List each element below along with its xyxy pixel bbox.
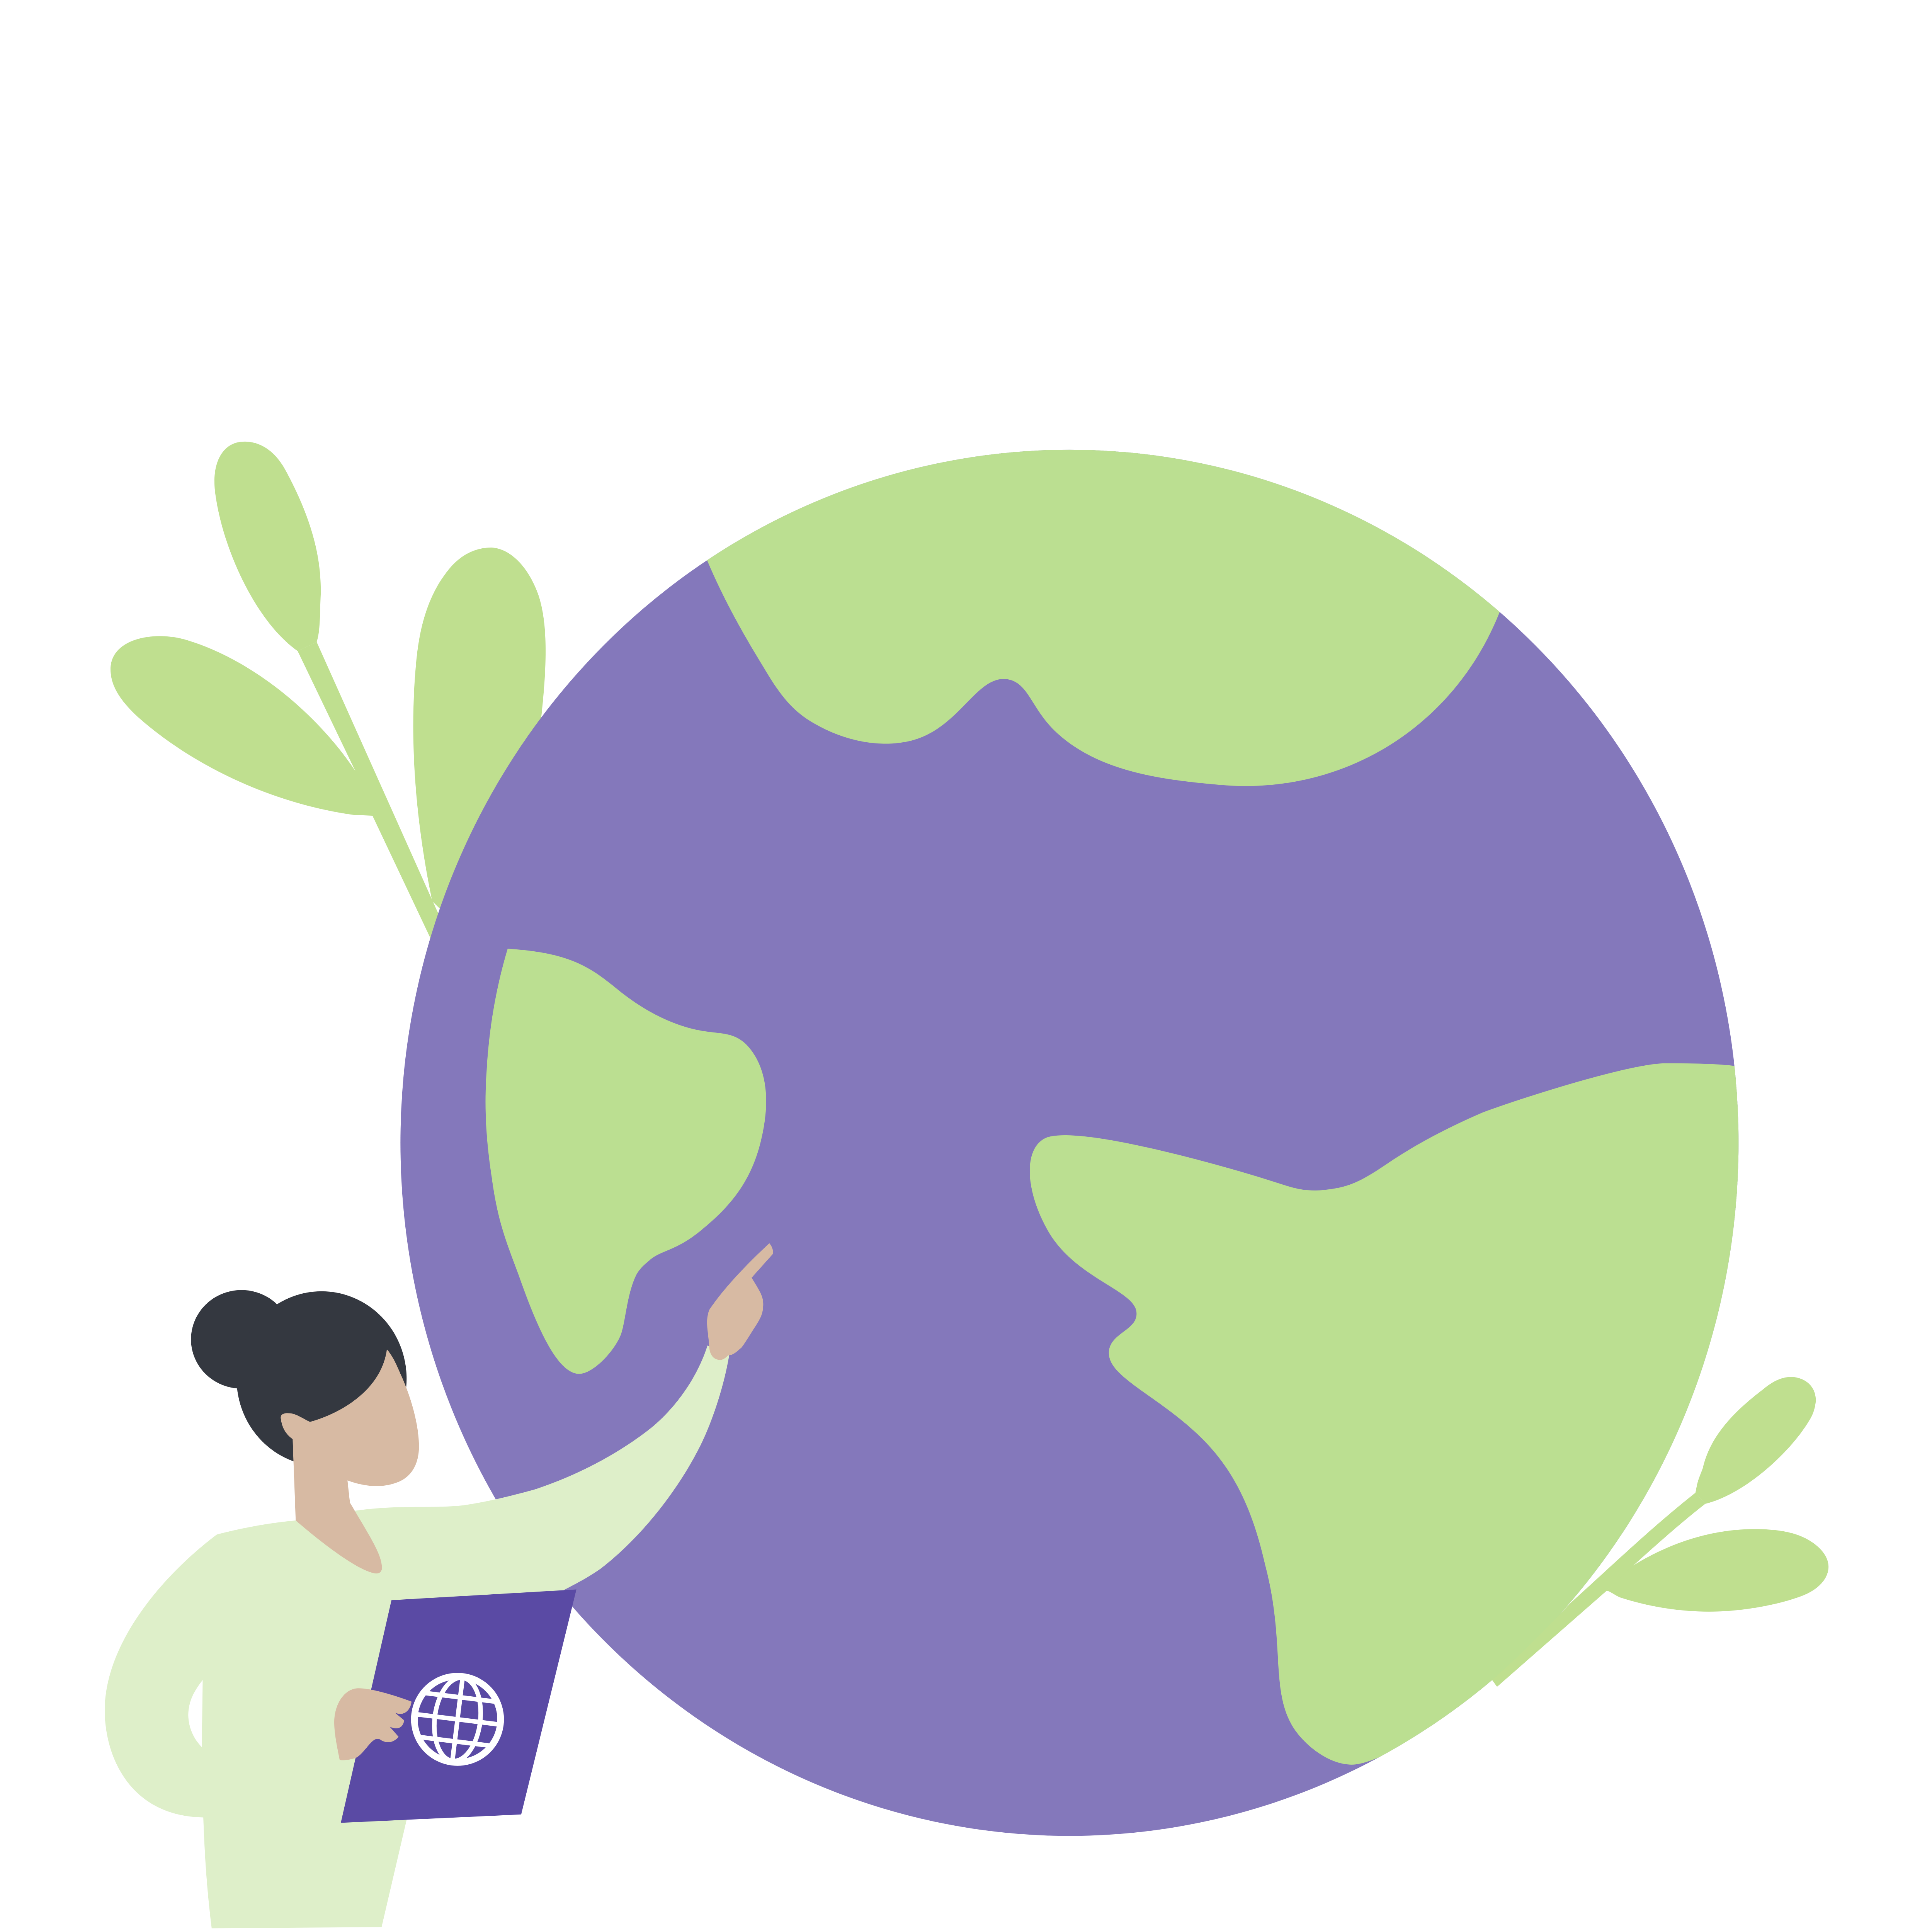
leaf: left: [111, 636, 382, 816]
illustration: woman pointing at a globe: [105, 441, 1828, 1928]
hand holding tablet: [334, 1688, 412, 1760]
hair bun: [191, 1290, 292, 1389]
right plant branch: [1492, 1377, 1828, 1687]
woman: [105, 1243, 773, 1928]
continents: [485, 370, 1848, 1765]
hand pointing at globe: [707, 1243, 773, 1360]
leaf: lower right: [1607, 1529, 1828, 1612]
tablet: [341, 1590, 577, 1823]
leaf: centre: [413, 548, 546, 942]
hair: [191, 1290, 406, 1466]
hair head: [236, 1291, 406, 1466]
continent: top: [665, 370, 1540, 786]
face and neck: [281, 1349, 419, 1573]
branch stem: [1492, 1493, 1705, 1687]
plant stem: [298, 642, 468, 980]
leaf: top: [214, 442, 321, 651]
tablet body: [341, 1590, 577, 1823]
left plant: [111, 442, 546, 980]
globe disc: [400, 450, 1738, 1836]
icon: globe on tablet: [410, 1671, 505, 1767]
sweater with raised arm: [105, 1345, 729, 1928]
continent: right: [1030, 1063, 1848, 1765]
globe: [400, 450, 1739, 1836]
continent: left: [485, 949, 766, 1374]
leaf: upper right: [1696, 1377, 1816, 1504]
